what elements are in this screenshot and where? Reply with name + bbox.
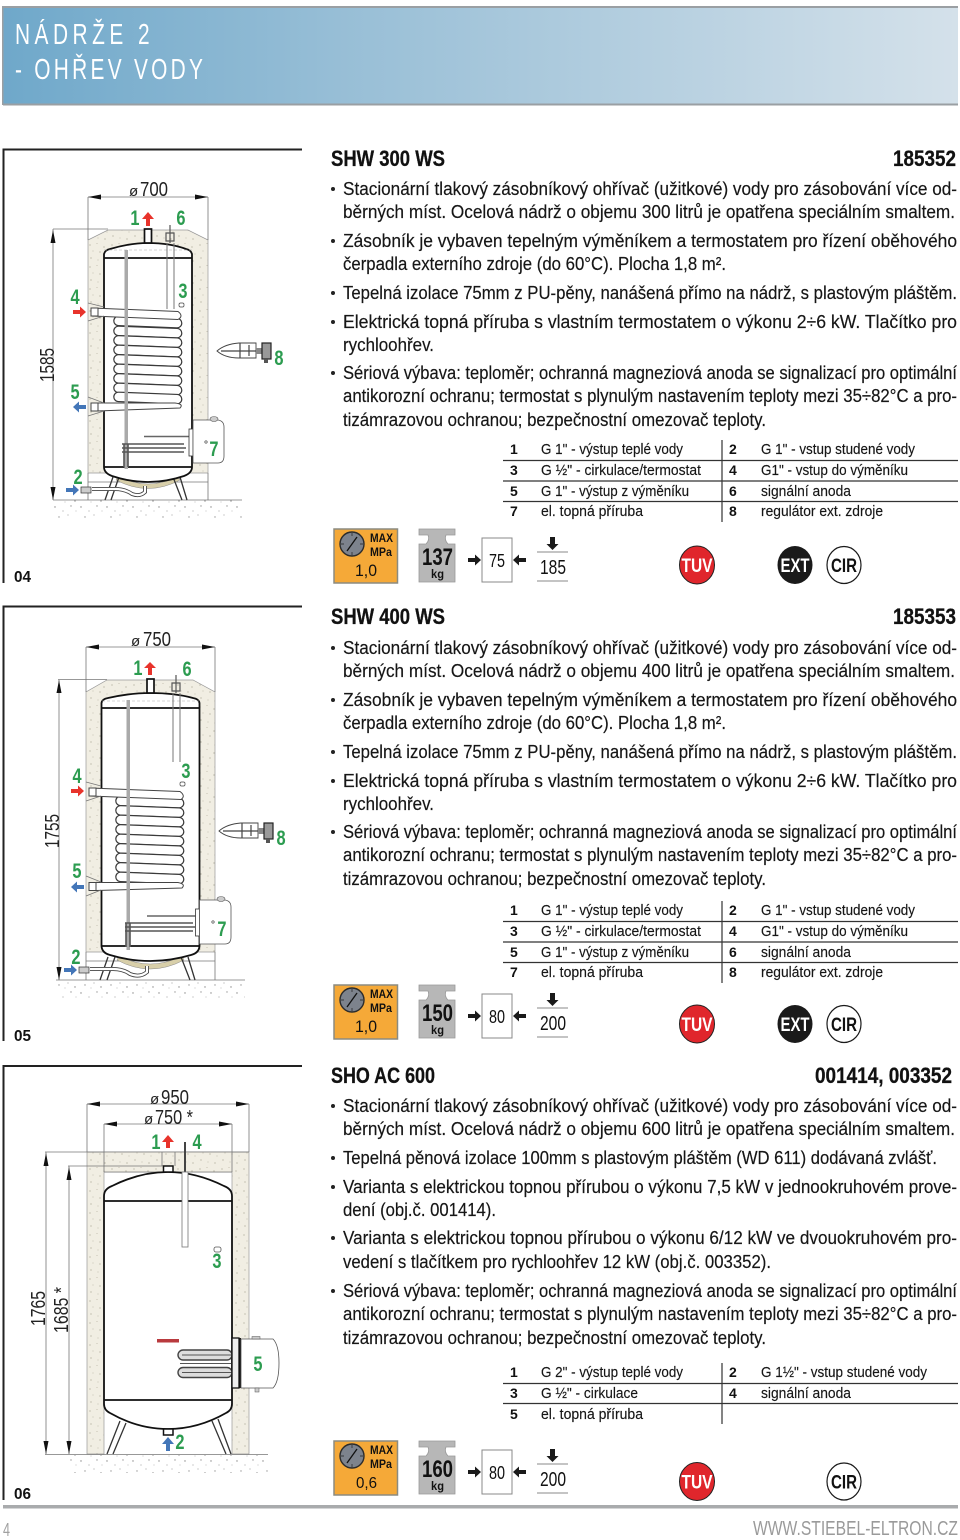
diagram: SHW 300 WS tank xyxy=(4,150,302,586)
heading: SHW 400 WS xyxy=(331,604,956,629)
icons: specifications: kg xyxy=(431,1023,444,1037)
table: connections: el. topná příruba xyxy=(541,1407,644,1423)
icons: specifications xyxy=(334,529,861,584)
diagram: SHO AC 600 tank: 3 xyxy=(212,1249,222,1272)
icons: specifications: 1,0 xyxy=(355,561,377,580)
table: connections: el. topná příruba xyxy=(541,504,644,520)
table: connections: 6 xyxy=(729,483,737,499)
panel: SHW 400 WS xyxy=(4,604,958,1045)
header band xyxy=(2,6,958,106)
heading: SHO AC 600: SHO AC 600 xyxy=(331,1063,435,1088)
panel: SHO AC 600 xyxy=(4,1063,958,1503)
text block: description: tizámrazovou ochranou; bezpečnostní omezovač teploty. xyxy=(343,868,766,889)
diagram: SHW 400 WS tank: 1 xyxy=(133,656,143,679)
text block: description: tizámrazovou ochranou; bezpečnostní omezovač teploty. xyxy=(343,409,766,430)
text block: description xyxy=(331,637,958,889)
icons: specifications: EXT xyxy=(780,556,810,577)
icons: specifications: 1,0 xyxy=(355,1017,377,1036)
diagram: SHW 400 WS tank: 3 xyxy=(181,759,191,782)
diagram: SHW 300 WS tank: 1585 xyxy=(37,348,59,382)
table: connections: 5 xyxy=(510,944,518,960)
table: connections: el. topná příruba xyxy=(541,965,644,981)
table: connections: regulátor ext. zdroje xyxy=(761,504,883,520)
icons: specifications: 0,6 xyxy=(356,1475,377,1492)
diagram: SHO AC 600 tank: 1765 xyxy=(28,1291,50,1326)
table: connections: 4 xyxy=(729,462,737,478)
table: connections: 3 xyxy=(510,1385,518,1401)
diagram: SHW 400 WS tank: 6 xyxy=(182,657,192,680)
icons: specifications: 200 xyxy=(540,1469,566,1491)
icons: specifications: 200 xyxy=(540,1013,566,1035)
table: connections: G ½" - cirkulace/termostat xyxy=(541,463,701,479)
icons: specifications: CIR xyxy=(831,1472,857,1494)
title: NÁDRŽE 2 xyxy=(15,18,150,51)
diagram: SHW 300 WS tank: 04 xyxy=(14,569,31,586)
icons: specifications: MAX xyxy=(370,1443,393,1457)
icons: specifications: 137 xyxy=(422,544,453,571)
diagram: SHO AC 600 tank: 750 * xyxy=(155,1107,193,1129)
icons: specifications xyxy=(334,985,861,1043)
diagram: SHW 300 WS tank: ø xyxy=(129,183,138,200)
table: connections: 4 xyxy=(729,1385,737,1401)
diagram: SHW 300 WS tank: 1 xyxy=(130,206,140,229)
diagram: SHW 400 WS tank: 2 xyxy=(71,945,81,968)
icons: specifications: TUV xyxy=(682,1015,713,1036)
diagram: SHO AC 600 tank: ø xyxy=(144,1111,153,1128)
diagram: SHO AC 600 tank: 1685 * xyxy=(51,1287,73,1333)
table: connections: G 1" - výstup teplé vody xyxy=(541,442,684,458)
diagram: SHO AC 600 tank: 06 xyxy=(14,1486,31,1503)
diagram: SHW 300 WS tank: 7 xyxy=(209,437,219,460)
icons: specifications: 80 xyxy=(489,1463,505,1483)
diagram: SHW 400 WS tank: 8 xyxy=(276,826,286,849)
diagram: SHW 400 WS tank: 7 xyxy=(217,917,227,940)
heading: SHW 400 WS: SHW 400 WS xyxy=(331,604,445,629)
table: connections: 1 xyxy=(510,1364,518,1380)
diagram: SHW 400 WS tank: 1755 xyxy=(42,814,64,848)
diagram: SHW 300 WS tank: 6 xyxy=(176,206,186,229)
icons: specifications: 185 xyxy=(540,557,566,579)
table: connections: G 1" - vstup studené vody xyxy=(761,903,916,919)
diagram: SHW 400 WS tank: 4 xyxy=(73,764,82,787)
text block: description: dení (obj.č. 001414). xyxy=(343,1199,496,1220)
table: connections: 1 xyxy=(510,902,518,918)
table: connections: 4 xyxy=(729,923,737,939)
text block: description: rychloohřev. xyxy=(343,334,434,355)
diagram: SHW 300 WS tank: 700 xyxy=(140,179,168,201)
table: connections: 2 xyxy=(729,441,737,457)
table: connections xyxy=(503,440,958,522)
heading: SHO AC 600 xyxy=(331,1063,952,1088)
diagram: SHO AC 600 tank: 4 xyxy=(193,1130,202,1153)
diagram: SHO AC 600 tank: 2 xyxy=(175,1430,185,1453)
table: connections: G 1" - výstup z výměníku xyxy=(541,945,689,961)
table: connections: G 1" - výstup teplé vody xyxy=(541,903,684,919)
text block: description: rychloohřev. xyxy=(343,793,434,814)
table: connections: G1" - vstup do výměníku xyxy=(761,463,908,479)
icons: specifications: 150 xyxy=(422,1000,453,1027)
diagram: SHW 300 WS tank: 2 xyxy=(73,465,83,488)
table: connections: 2 xyxy=(729,1364,737,1380)
diagram: SHW 400 WS tank: 05 xyxy=(14,1028,31,1045)
table: connections xyxy=(503,901,958,983)
diagram: SHW 300 WS tank: 3 xyxy=(178,279,188,302)
icons: specifications: MAX xyxy=(370,987,393,1001)
table: connections: G 1½" - vstup studené vody xyxy=(761,1365,928,1381)
diagram: SHO AC 600 tank: 950 xyxy=(161,1087,189,1109)
diagram: SHW 400 WS tank: 5 xyxy=(72,859,82,882)
table: connections: 8 xyxy=(729,503,737,519)
icons: specifications: TUV xyxy=(682,1472,713,1494)
table: connections: 6 xyxy=(729,944,737,960)
table: connections: 7 xyxy=(510,503,518,519)
icons: specifications: MPa xyxy=(370,545,392,559)
diagram: SHO AC 600 tank xyxy=(4,1066,302,1503)
table: connections: signální anoda xyxy=(761,945,852,961)
heading: SHW 300 WS xyxy=(331,146,956,171)
table: connections: G ½" - cirkulace/termostat xyxy=(541,924,701,940)
diagram: SHW 400 WS tank: 750 xyxy=(143,629,171,651)
icons: specifications: CIR xyxy=(831,1015,857,1036)
text block: description xyxy=(331,1095,958,1348)
diagram: SHO AC 600 tank: ø xyxy=(150,1091,159,1108)
text block: description xyxy=(331,178,958,430)
diagram: SHW 400 WS tank xyxy=(4,606,302,1045)
table: connections xyxy=(503,1363,958,1424)
table: connections: 3 xyxy=(510,462,518,478)
icons: specifications: 160 xyxy=(422,1456,453,1483)
diagram: SHO AC 600 tank: 1 xyxy=(151,1130,161,1153)
icons: specifications: 75 xyxy=(489,551,505,571)
icons: specifications: kg xyxy=(431,567,444,581)
table: connections: G 1" - vstup studené vody xyxy=(761,442,916,458)
table: connections: G 1" - výstup z výměníku xyxy=(541,484,689,500)
table: connections: 7 xyxy=(510,964,518,980)
diagram: SHW 400 WS tank: ø xyxy=(131,633,140,650)
icons: specifications: MPa xyxy=(370,1001,392,1015)
table: connections: signální anoda xyxy=(761,1386,852,1402)
table: connections: 5 xyxy=(510,483,518,499)
heading: SHW 300 WS: SHW 300 WS xyxy=(331,146,445,171)
footer: page number: 4 xyxy=(3,1520,10,1540)
table: connections: G ½" - cirkulace xyxy=(541,1386,638,1402)
text block: description: čerpadla externího zdroje (do 60°C). Plocha 1,8 m². xyxy=(343,253,726,274)
text block: description: čerpadla externího zdroje (do 60°C). Plocha 1,8 m². xyxy=(343,712,726,733)
icons: specifications: MAX xyxy=(370,531,393,545)
table: connections: signální anoda xyxy=(761,484,852,500)
icons: specifications: EXT xyxy=(780,1015,810,1036)
icons: specifications: kg xyxy=(431,1479,444,1493)
table: connections: 3 xyxy=(510,923,518,939)
icons: specifications: 80 xyxy=(489,1007,505,1027)
table: connections: 5 xyxy=(510,1406,518,1422)
diagram: SHW 300 WS tank: 5 xyxy=(70,380,80,403)
title xyxy=(15,18,203,86)
diagram: SHW 300 WS tank: 8 xyxy=(274,346,284,369)
table: connections: 2 xyxy=(729,902,737,918)
text block: description: vedení s tlačítkem pro rychloohřev 12 kW (obj.č. 003352). xyxy=(343,1251,771,1272)
table: connections: G 2" - výstup teplé vody xyxy=(541,1365,684,1381)
diagram: SHW 300 WS tank: 4 xyxy=(71,285,80,308)
icons: specifications: CIR xyxy=(831,556,857,577)
panel: SHW 300 WS xyxy=(4,146,958,586)
table: connections: 8 xyxy=(729,964,737,980)
icons: specifications xyxy=(334,1441,861,1500)
text block: description: tizámrazovou ochranou; bezpečnostní omezovač teploty. xyxy=(343,1327,766,1348)
diagram: SHO AC 600 tank: 5 xyxy=(253,1352,263,1375)
table: connections: 1 xyxy=(510,441,518,457)
icons: specifications: TUV xyxy=(682,556,713,577)
table: connections: regulátor ext. zdroje xyxy=(761,965,883,981)
title: - OHŘEV VODY xyxy=(15,53,203,86)
icons: specifications: MPa xyxy=(370,1457,392,1471)
table: connections: G1" - vstup do výměníku xyxy=(761,924,908,940)
